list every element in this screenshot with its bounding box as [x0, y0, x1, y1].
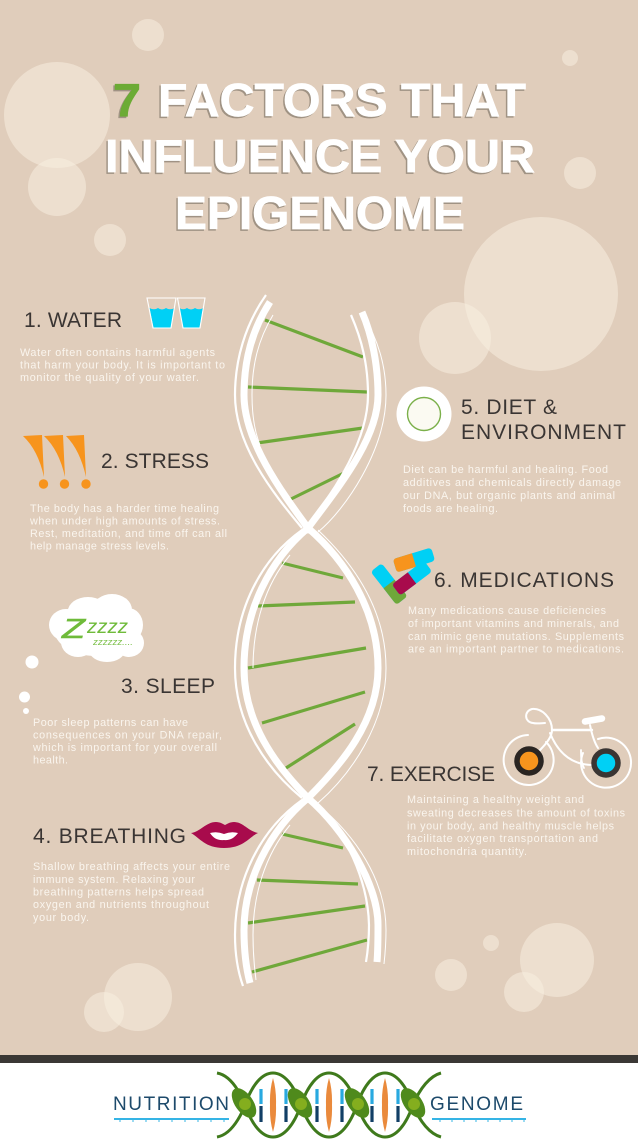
- icon: thought cloud: [19, 594, 144, 714]
- heading: sleep: 3. SLEEP: [121, 675, 215, 698]
- text: exercise: [407, 794, 626, 858]
- icon: thought cloud: Z: [61, 613, 86, 644]
- icon: thought cloud: zzzzzz....: [92, 637, 133, 647]
- text: breathing: immune system. Relaxing your: [33, 874, 195, 886]
- icon: pills: [371, 547, 435, 605]
- text: medications: can mimic gene mutations. Supplements: [408, 631, 625, 643]
- panel: medications: [371, 547, 625, 656]
- title: [104, 74, 535, 240]
- heading: diet: [461, 396, 626, 444]
- text: water: Water often contains harmful agents: [20, 347, 216, 359]
- text: sleep: which is important for your overall: [32, 742, 217, 754]
- heading: diet: ENVIRONMENT: [461, 421, 626, 444]
- text: stress: The body has a harder time healing: [30, 503, 219, 515]
- text: sleep: health.: [33, 754, 68, 766]
- text: breathing: Shallow breathing affects your entire: [33, 861, 230, 873]
- text: exercise: Maintaining a healthy weight and: [407, 794, 584, 806]
- text: medications: are an important partner to medications.: [408, 644, 624, 656]
- panel: sleep: [19, 594, 222, 766]
- text: exercise: mitochondria quantity.: [407, 846, 527, 858]
- text: sleep: [32, 717, 222, 766]
- text: medications: of important vitamins and minerals, and: [408, 618, 619, 630]
- heading: breathing: 4. BREATHING: [33, 825, 186, 848]
- text: diet: [403, 464, 621, 515]
- text: breathing: [33, 861, 230, 924]
- heading: stress: 2. STRESS: [101, 450, 209, 473]
- icon: water glasses: [147, 298, 205, 328]
- title: 7: [112, 76, 140, 128]
- heading: medications: 6. MEDICATIONS: [434, 569, 614, 592]
- text: exercise: sweating decreases the amount of toxins: [407, 808, 626, 820]
- text: exercise: facilitate oxygen transportation and: [407, 833, 598, 845]
- text: stress: Rest, meditation, and time off can all: [30, 528, 227, 540]
- text: stress: [29, 503, 227, 552]
- panel: stress: [23, 435, 227, 552]
- text: stress: when under high amounts of stress.: [29, 516, 220, 528]
- text: water: [20, 347, 225, 384]
- title: 7: [113, 74, 141, 126]
- text: medications: Many medications cause deficiencies: [408, 605, 607, 617]
- text: breathing: oxygen and nutrients throughout: [33, 899, 209, 911]
- icon: bicycle: [504, 709, 631, 788]
- dna helix: [235, 295, 386, 986]
- text: diet: Diet can be harmful and healing. Food: [403, 464, 608, 476]
- text: water: monitor the quality of your water.: [20, 372, 199, 384]
- text: breathing: breathing patterns helps spread: [33, 886, 204, 898]
- heading: water: 1. WATER: [24, 309, 122, 332]
- logo: GENOME: [430, 1094, 523, 1115]
- icon: thought cloud: zzzz: [86, 617, 129, 638]
- text: exercise: in your body, and healthy muscle helps: [407, 820, 615, 832]
- footer: [0, 1055, 638, 1147]
- icon: exclamation marks: [23, 435, 91, 489]
- icon: lips: [191, 822, 258, 848]
- heading: exercise: 7. EXERCISE: [367, 763, 495, 786]
- logo: NUTRITION: [113, 1094, 229, 1115]
- title: INFLUENCE YOUR: [104, 132, 534, 184]
- panel: diet: [396, 386, 626, 515]
- logo: [113, 1073, 526, 1137]
- panel: exercise: [367, 709, 631, 858]
- title: FACTORS THAT: [158, 74, 526, 126]
- title: EPIGENOME: [174, 188, 464, 240]
- text: diet: foods are healing.: [403, 503, 498, 515]
- text: water: that harm your body. It is important to: [20, 360, 225, 372]
- text: sleep: Poor sleep patterns can have: [33, 717, 188, 729]
- panel: water: [20, 298, 225, 384]
- panel: breathing: [33, 822, 258, 924]
- heading: diet: 5. DIET &: [461, 396, 557, 419]
- text: medications: [408, 605, 625, 656]
- title: FACTORS THAT: [156, 76, 524, 128]
- text: sleep: consequences on your DNA repair,: [33, 730, 222, 742]
- text: diet: our DNA, but organic plants and animal: [403, 490, 615, 502]
- icon: plate: [396, 386, 452, 442]
- text: diet: additives and chemicals directly damage: [403, 477, 621, 489]
- text: stress: help manage stress levels.: [30, 540, 169, 552]
- text: breathing: your body.: [33, 912, 89, 924]
- title: EPIGENOME: [175, 187, 465, 239]
- title: INFLUENCE YOUR: [105, 130, 535, 182]
